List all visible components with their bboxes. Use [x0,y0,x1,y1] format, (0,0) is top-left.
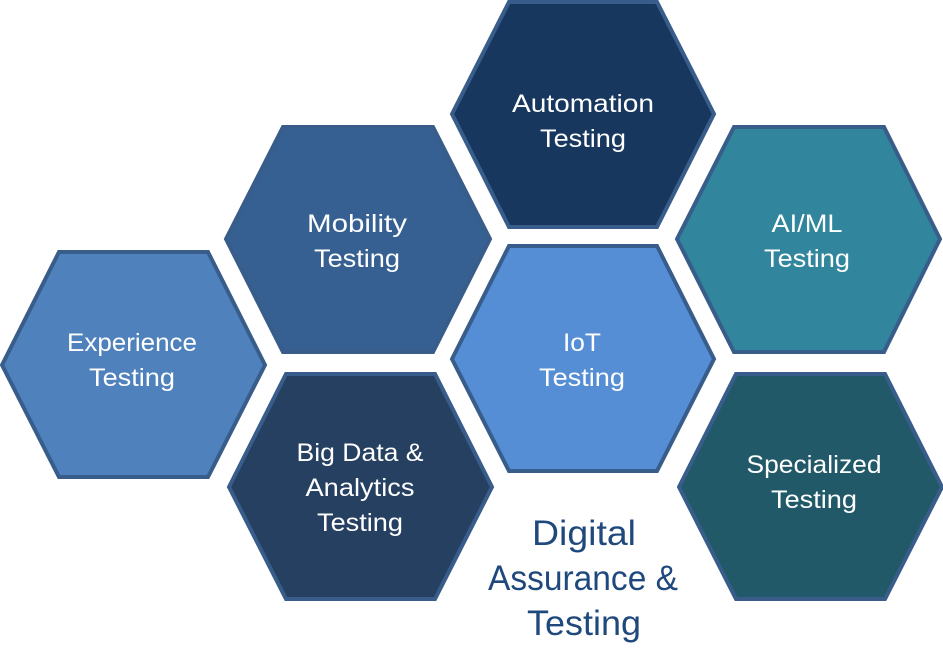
hexagon: IoT Testing: Testing [539,364,625,392]
hexagon: Mobility Testing [226,127,490,352]
hexagon: Mobility Testing: Mobility [307,210,408,238]
hexagon: AI/ML Testing: AI/ML [772,210,843,238]
hexagon: AI/ML Testing: Testing [764,245,850,273]
hexagon: Automation Testing: Testing [540,125,626,153]
hexagon: IoT Testing: IoT [563,329,601,357]
hexagon: Automation Testing: Automation [512,90,654,118]
title: Digital Assurance and Testing [488,514,678,643]
hexagon: Experience Testing [2,252,265,477]
hexagon: AI/ML Testing [677,127,940,352]
hexagon: Automation Testing [452,2,714,227]
hexagon: Big Data and Analytics Testing: Big Data & [296,439,424,467]
title: Digital Assurance and Testing: Digital [532,514,636,553]
hexagon: Experience Testing: Testing [89,364,175,392]
title: Digital Assurance and Testing: Testing [527,604,641,643]
hexagon: Big Data and Analytics Testing: Analytics [306,474,414,502]
hexagon: Big Data and Analytics Testing [229,374,492,599]
hexagon: Experience Testing: Experience [67,329,197,357]
hexagon: Specialized Testing [679,374,942,599]
hexagon: IoT Testing [452,246,714,471]
hexagon: Specialized Testing: Testing [771,486,857,514]
hexagon: Big Data and Analytics Testing: Testing [317,509,403,537]
hexagon: Specialized Testing: Specialized [746,451,882,479]
title: Digital Assurance and Testing: Assurance & [488,559,678,598]
hexagon: Mobility Testing: Testing [314,245,400,273]
